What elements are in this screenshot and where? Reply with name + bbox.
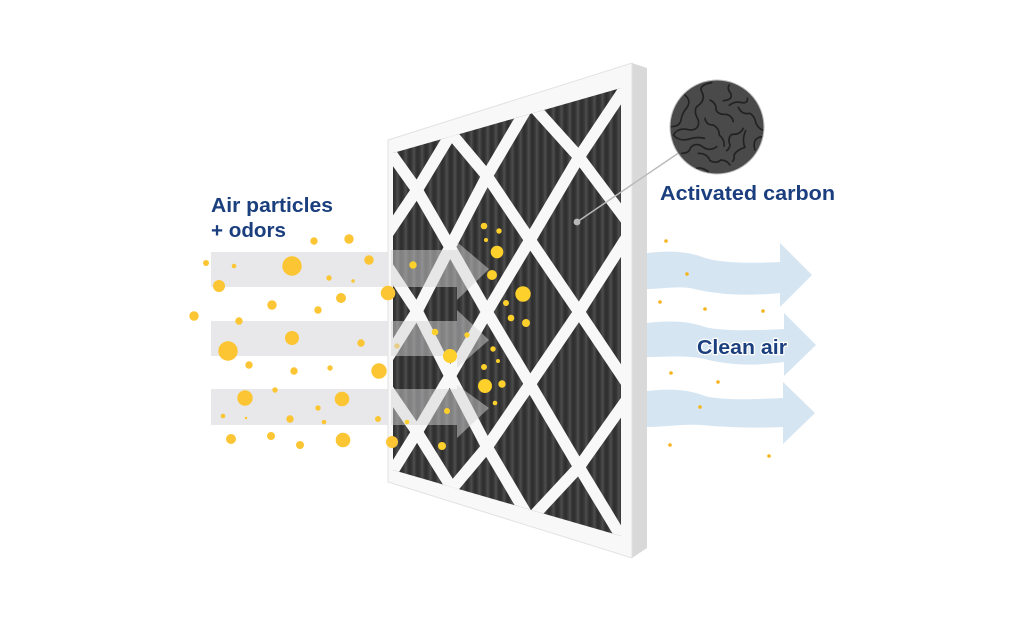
label: air particles and odors	[211, 195, 333, 242]
particles before filter	[189, 234, 400, 449]
callout line and dot	[574, 152, 680, 225]
translucent arrows over filter	[391, 242, 489, 438]
magnified carbon circle	[670, 80, 764, 174]
grey incoming air bands	[211, 252, 391, 425]
label: air particles and odors: + odors	[211, 220, 286, 242]
air filter	[375, 63, 647, 558]
carbon pleats	[393, 88, 621, 536]
particles inside filter	[405, 223, 531, 450]
filter side edge	[632, 63, 647, 558]
filter frame	[388, 63, 632, 558]
label: activated carbon: Activated carbon	[660, 183, 835, 205]
label: air particles and odors: Air particles	[211, 195, 333, 217]
particles after filter	[658, 239, 771, 458]
label: clean air: Clean air	[697, 336, 787, 359]
lattice	[393, 88, 621, 536]
clean air arrows	[647, 243, 816, 444]
